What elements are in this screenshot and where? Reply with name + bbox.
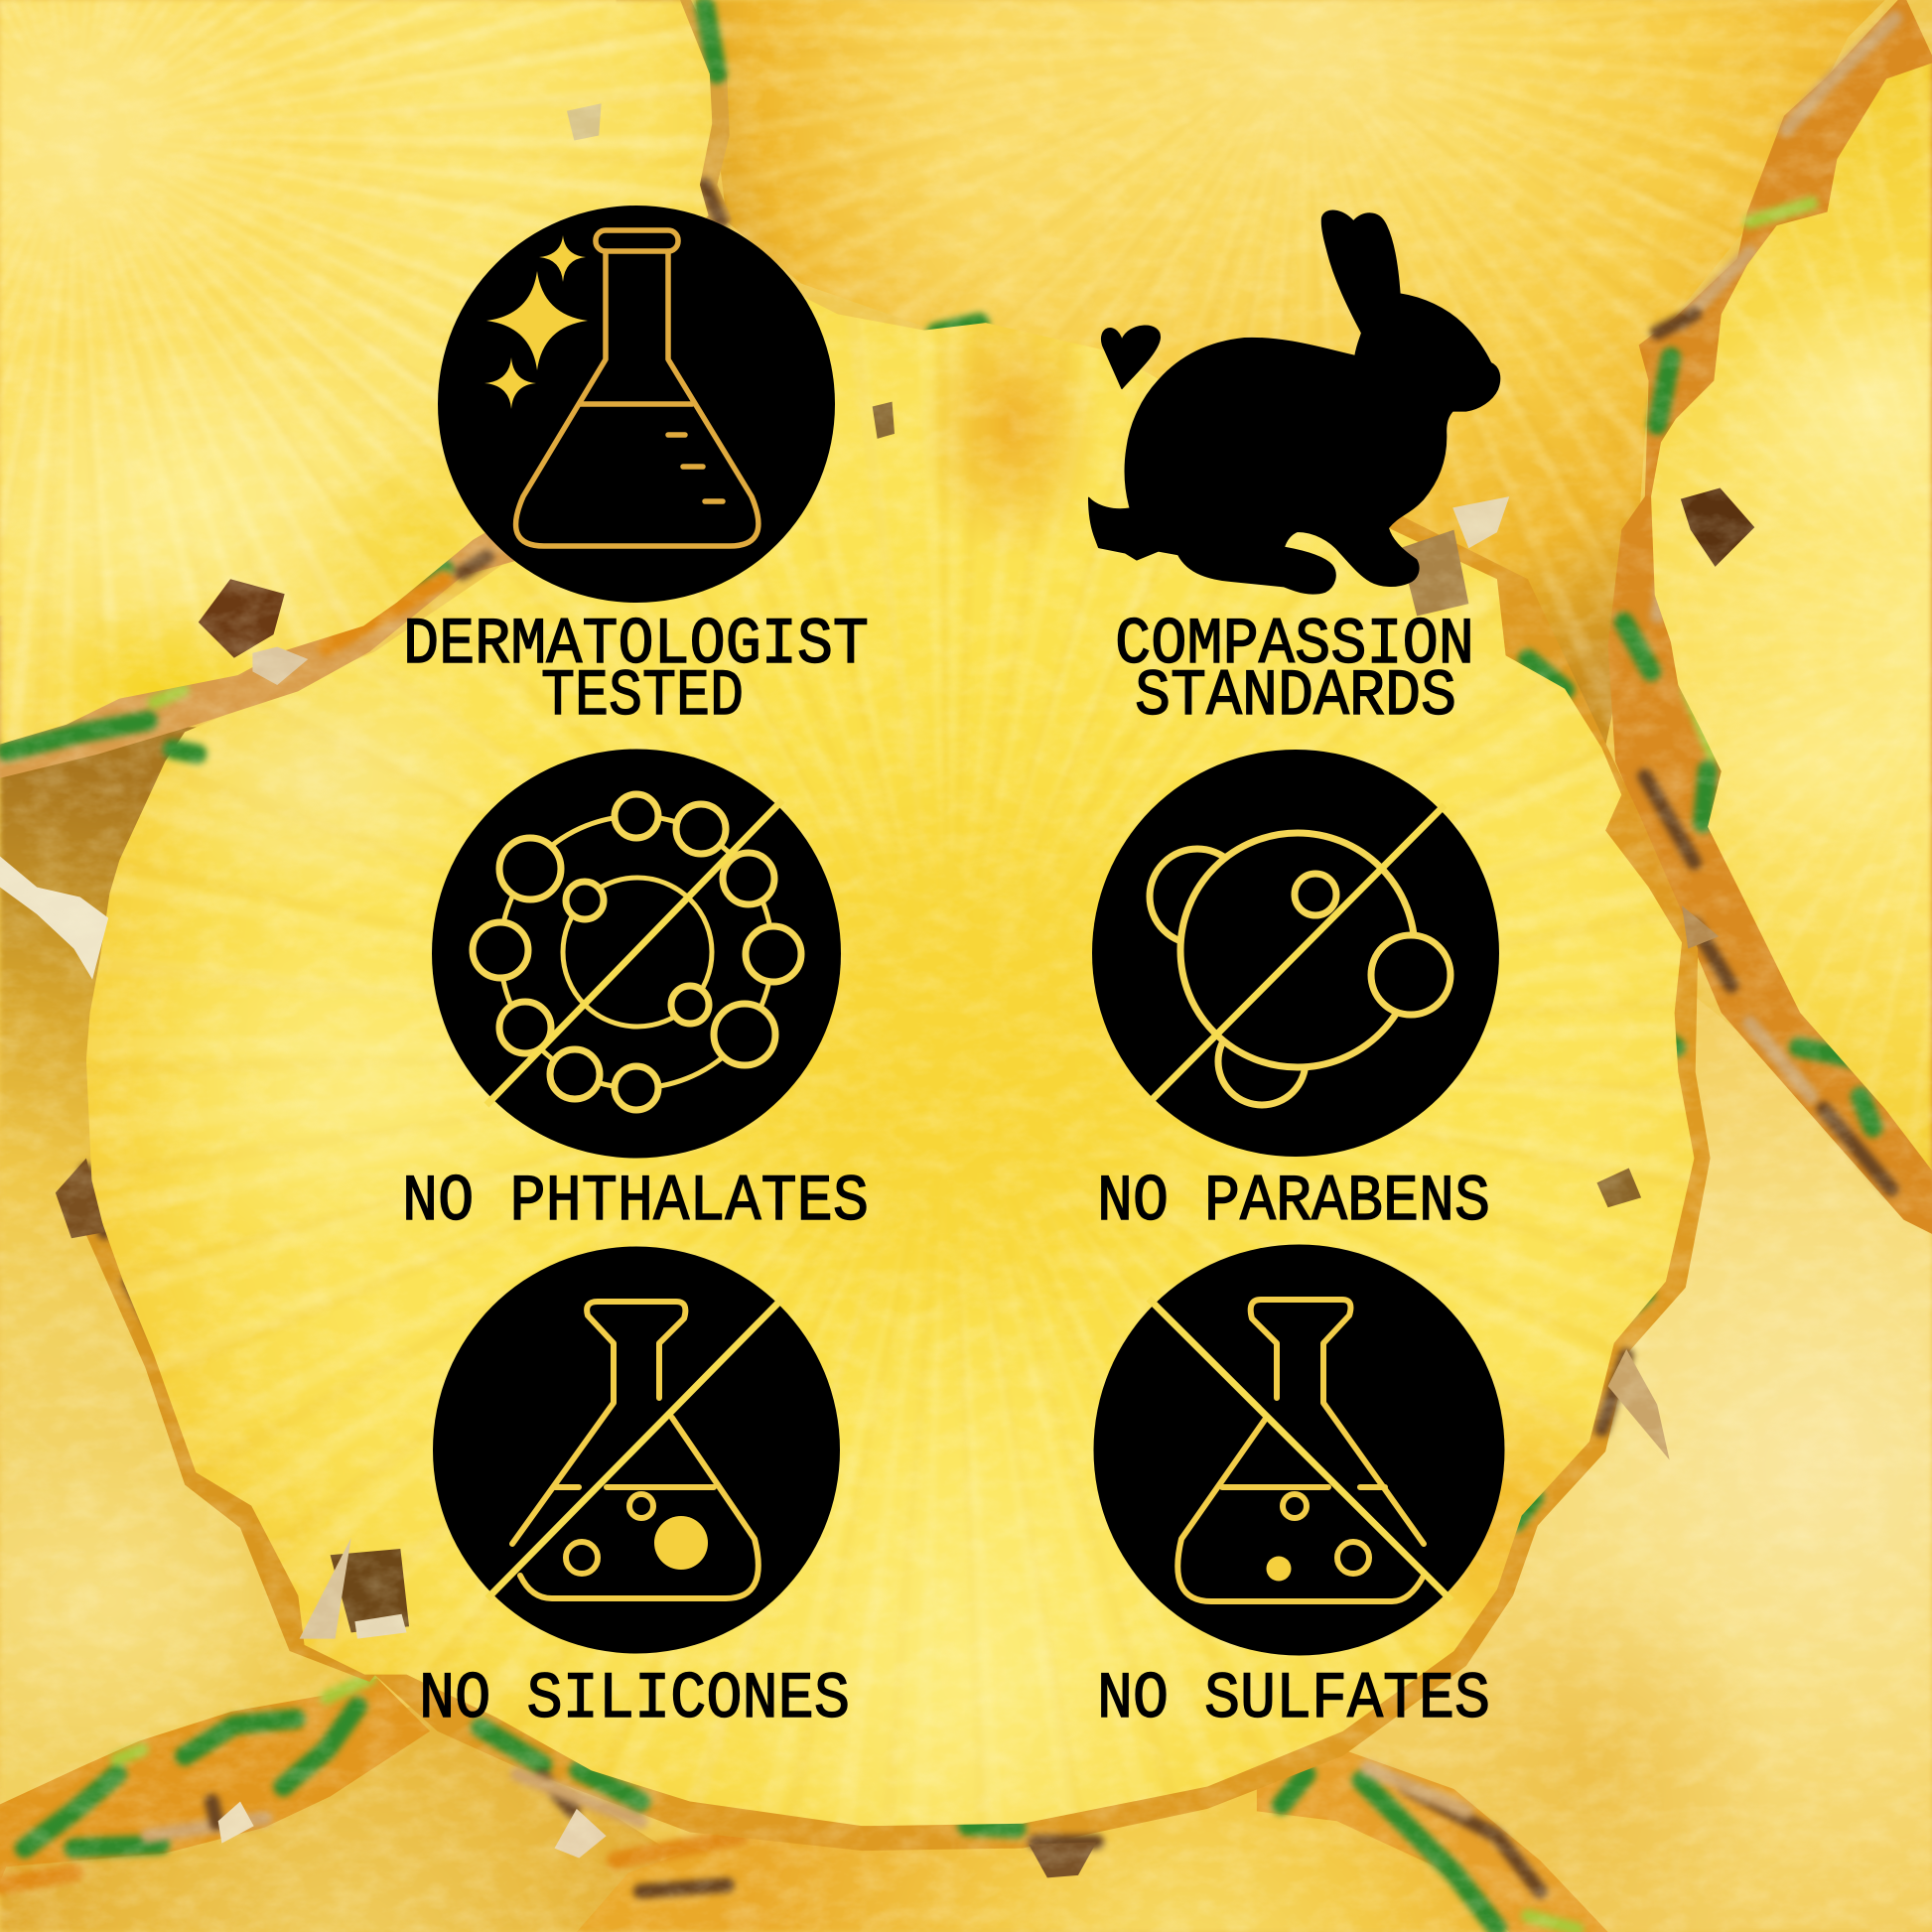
label: no silicones: NO SILICONES xyxy=(419,1662,850,1736)
label: no sulfates: NO SULFATES xyxy=(1097,1662,1490,1736)
slash xyxy=(487,1299,782,1598)
slice: bottom centre xyxy=(577,1751,1608,1932)
icon: molecule cluster xyxy=(1150,833,1450,1105)
badge: no sulfates xyxy=(1094,1245,1505,1656)
slice: top left xyxy=(0,0,733,778)
label: compassion standards: STANDARDS xyxy=(1135,659,1456,734)
label: dermatologist tested: DERMATOLOGIST xyxy=(403,608,869,682)
slash xyxy=(1147,805,1445,1105)
badge: no phthalates xyxy=(432,749,841,1158)
label: no phthalates: NO PHTHALATES xyxy=(402,1165,869,1239)
slice: top centre xyxy=(696,0,1884,745)
slice: left xyxy=(0,727,381,1804)
slash xyxy=(1149,1299,1451,1600)
label: dermatologist tested xyxy=(403,608,869,734)
badge: dermatologist tested xyxy=(438,206,835,603)
slice: bottom right xyxy=(1349,999,1932,1932)
badge: no parabens xyxy=(1092,750,1499,1157)
badge: no silicones xyxy=(433,1247,840,1654)
slash xyxy=(486,800,782,1105)
label: compassion standards: COMPASSION xyxy=(1115,608,1474,682)
icon: molecule ring xyxy=(473,794,801,1110)
slice: main centre pineapple xyxy=(74,298,1711,1855)
label: no parabens: NO PARABENS xyxy=(1097,1165,1490,1239)
label: dermatologist tested: TESTED xyxy=(541,659,744,734)
slice: right xyxy=(1608,0,1932,1234)
icon: crossed flask with bubbles xyxy=(1177,1300,1424,1601)
slice: bottom left background xyxy=(0,1708,661,1932)
label: compassion standards xyxy=(1115,608,1474,734)
icon: flask xyxy=(516,230,759,546)
icon: crossed flask with bubbles xyxy=(512,1302,759,1598)
icon: sparkles xyxy=(484,235,588,409)
icon: rabbit with heart xyxy=(1089,210,1500,594)
